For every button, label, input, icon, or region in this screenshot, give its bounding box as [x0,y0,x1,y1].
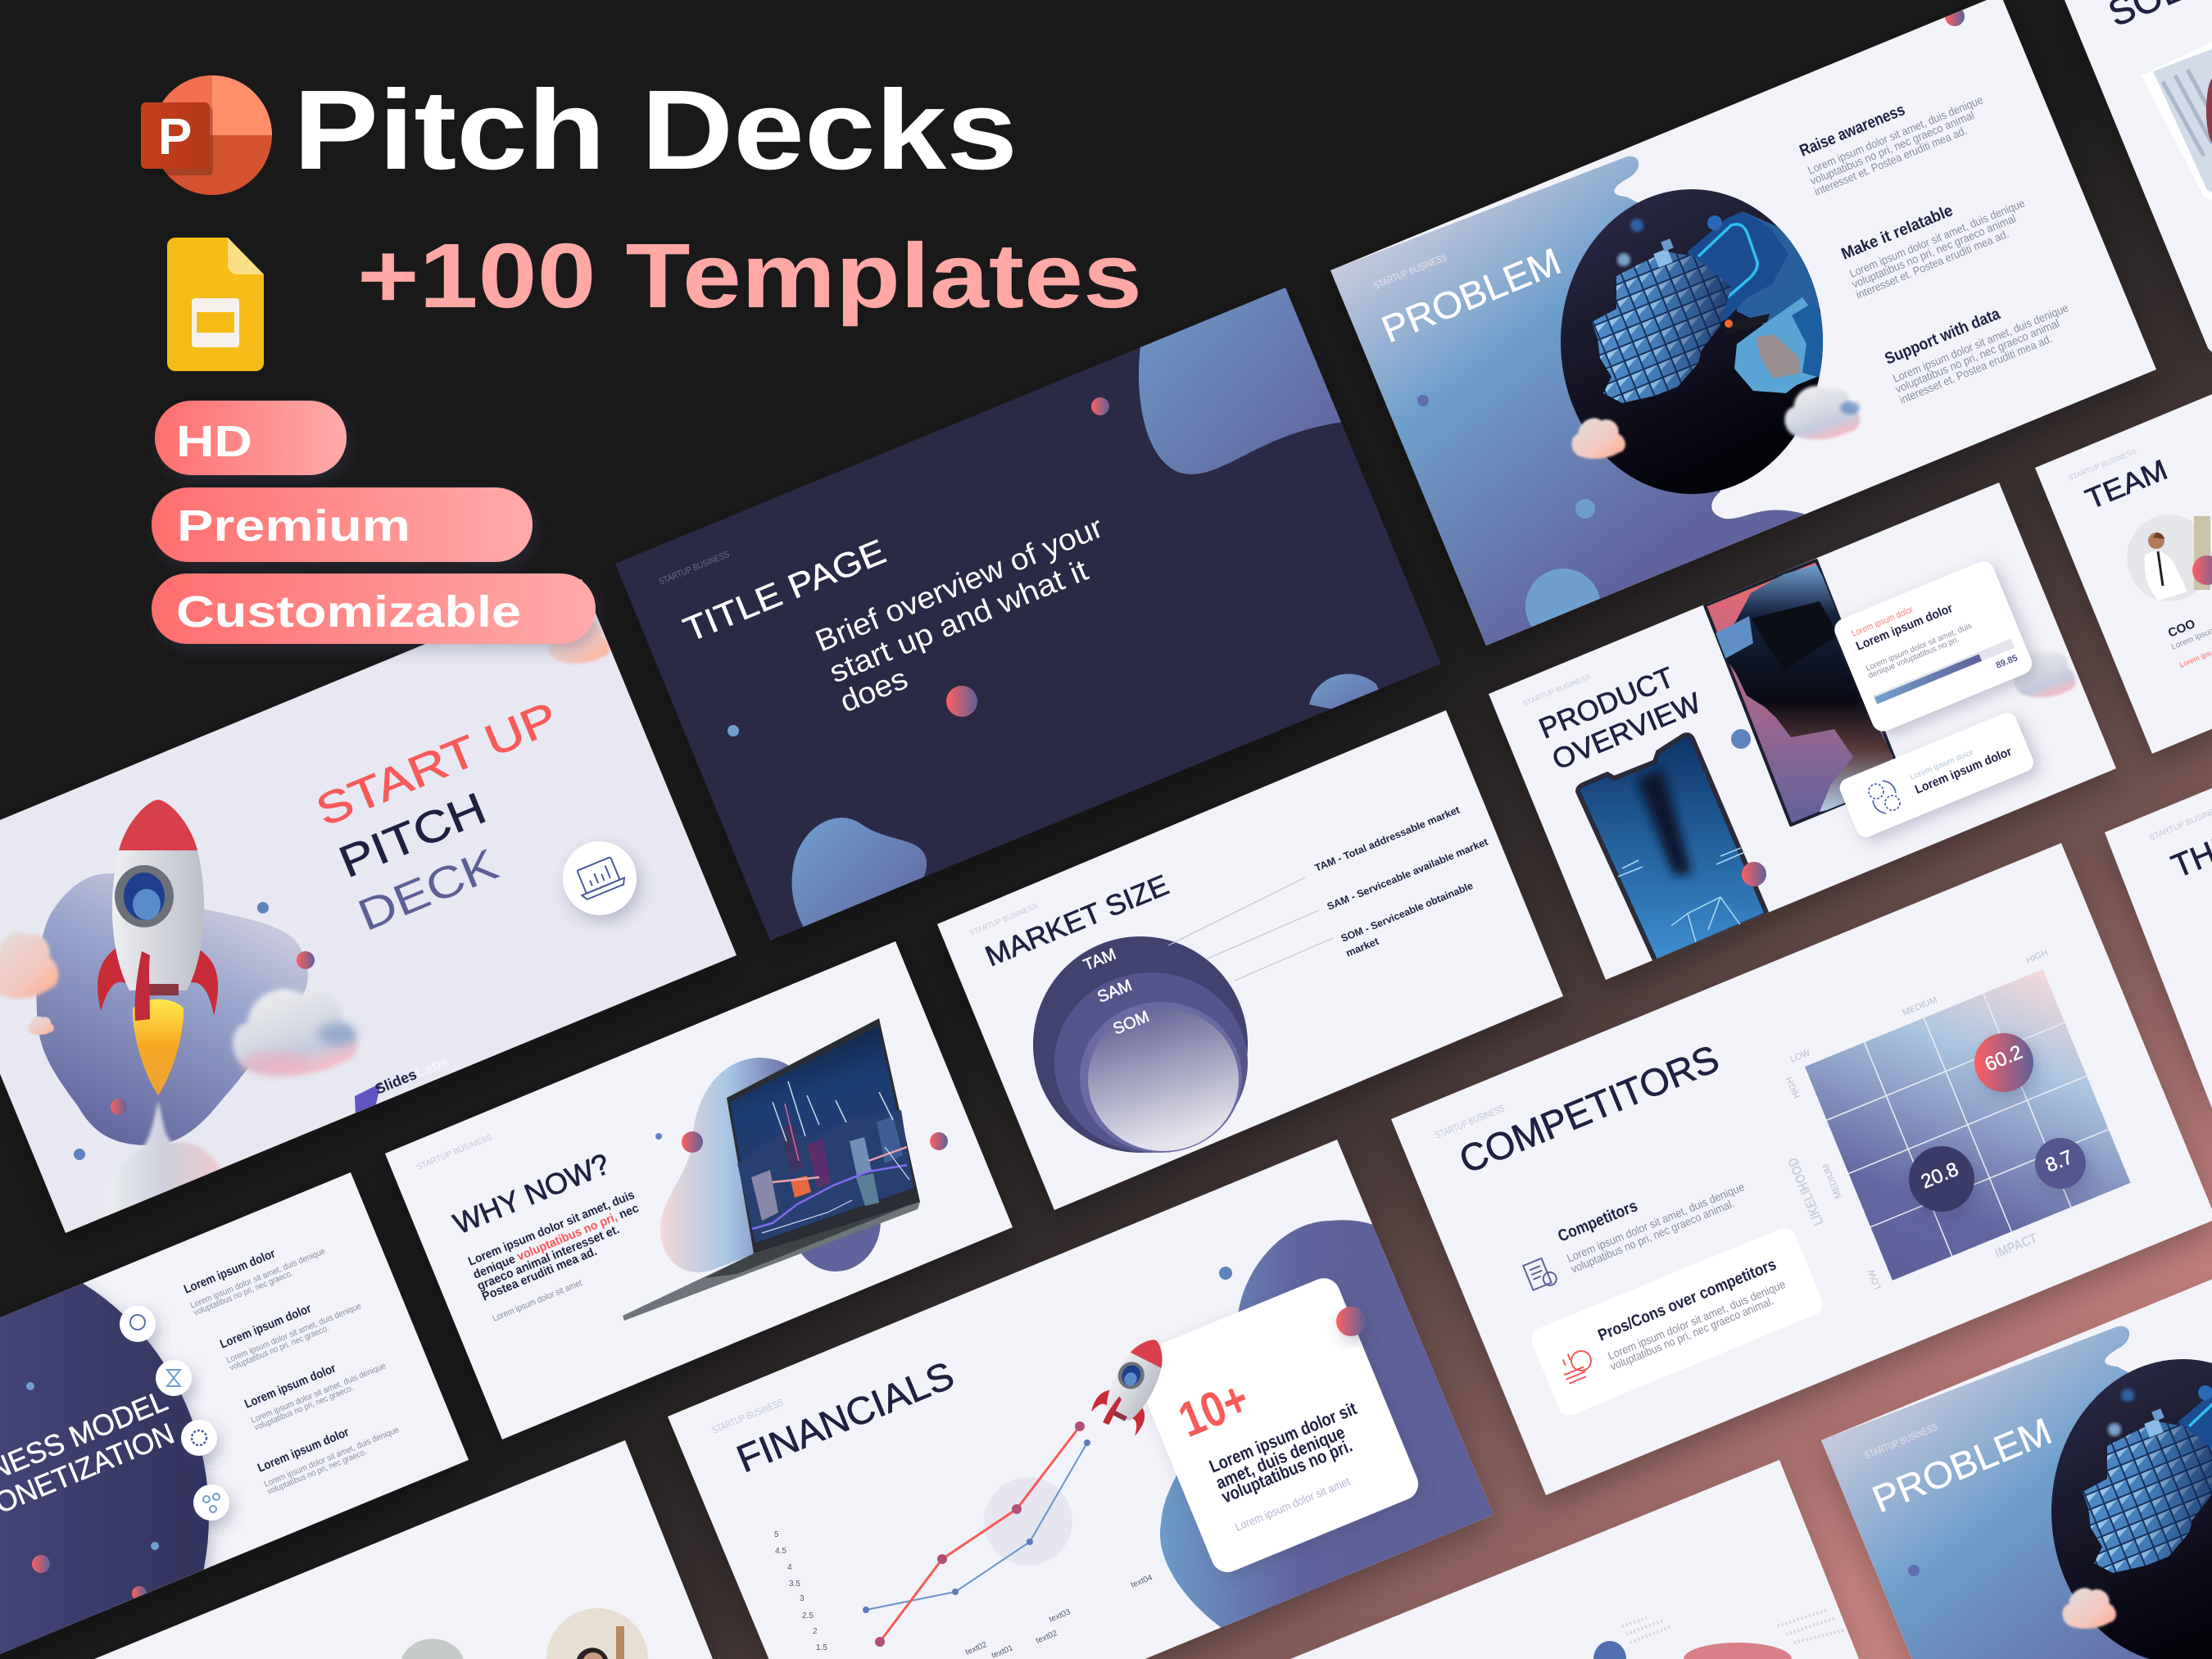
icon: powerpoint: P [158,109,192,165]
heading: product overview: OVERVIEW [1548,687,1706,776]
labels: matrix axes: MEDIUM [1902,995,1938,1018]
photo: gray circle [401,1639,464,1659]
card: 10+: Lorem ipsum dolor sit [1206,1398,1360,1477]
text: why now body: Postea eruditi mea ad. [480,1244,599,1304]
label: startup business: STARTUP BUSINESS [2067,447,2137,483]
labels: matrix axes: LOW [1866,1267,1883,1290]
text: make it relatable: Lorem ipsum dolor sit amet, duis denique [1847,196,2027,280]
text: raise awareness: Raise awareness [1797,101,1908,161]
panel: start up slide [0,579,737,1233]
text: coo: COO [2166,617,2197,641]
photo: coo [2127,514,2212,601]
heading: start up: START UP [310,693,564,836]
blob behind rocket [36,873,308,1145]
panel: bottom left slide [94,1440,713,1659]
text: overview [810,510,1108,718]
chart: line chart: text04 [1130,1573,1154,1590]
blob: behind laptop [791,1170,881,1271]
image: phone [1578,735,1767,962]
text: item 2: Lorem ipsum dolor sit amet, duis denique [225,1301,363,1366]
chart: line chart [774,1421,1154,1659]
text: overview: does [835,661,913,718]
logo: slides labs [355,1053,451,1116]
blob: blue [1593,1641,1626,1659]
rocket flame [133,999,184,1095]
icon: laptop chart [563,841,637,915]
text: why now body: Lorem ipsum dolor sit amet, duis [466,1188,637,1269]
card: pros and cons: Lorem ipsum dolor sit amet, duis denique [1606,1277,1788,1362]
dots [74,902,315,1160]
blob: right [1160,1220,1499,1630]
heading: team: TEAM [2081,454,2172,515]
card: lorem ipsum [1837,710,2036,840]
panel: why now slide [385,941,1013,1439]
text: competitors: Competitors [1556,1197,1640,1246]
chart: nested circles: SAM [1095,977,1135,1007]
title: pitch decks: Pitch Decks [293,67,1018,193]
cloud [2015,650,2076,697]
card: progress: denique voluptatibus no pri. [1867,635,1960,681]
text: overview: Brief overview of your [810,510,1108,658]
dots [655,1131,948,1153]
heading: problem: PROBLEM [1376,239,1566,351]
labels: market segments: TAM - Total addressable market [1313,804,1462,874]
chart: line chart: 1.5 [816,1643,827,1652]
text: why now body: graeco animal interesset et. [475,1222,621,1294]
icon: document gear [1523,1256,1558,1292]
label: startup business: STARTUP BUSINESS [968,902,1039,937]
text: item 3: Lorem ipsum dolor [243,1362,338,1412]
badge: hd: HD [176,417,252,466]
card: progress: Lorem ipsum dolor [1854,601,1955,654]
panel: market size slide [937,710,1563,1210]
chart: line chart: 2.5 [802,1611,814,1620]
panel: problem slide repeat [1821,1164,2212,1659]
labels: market segments: market [1344,935,1381,959]
labels: matrix axes: MEDIUM [1821,1163,1844,1199]
icons: circles [120,1306,229,1521]
labels: market segments: SAM - Serviceable available market [1326,836,1490,913]
heading: pitch: PITCH [333,783,492,887]
text: support with data: Support with data [1883,305,2003,369]
card: lorem ipsum: Lorem ipsum dolor [1913,745,2014,797]
heading: title page: TITLE PAGE [678,532,891,649]
text: item 1: Lorem ipsum dolor [182,1247,278,1297]
badge: customizable [152,573,596,644]
photo: woman [546,1608,648,1659]
labels: matrix axes: IMPACT [1992,1230,2040,1262]
text: overview: start up and what it [824,553,1093,689]
text: raise awareness: voluptatibus no pri, nec graeco animal [1808,108,1976,188]
chart: line chart: text02 [1035,1629,1059,1646]
labels: matrix axes: HIGH [1784,1075,1802,1099]
dots [1731,729,1766,886]
text: item 4: Lorem ipsum dolor [256,1426,351,1475]
text: item 3: Lorem ipsum dolor sit amet, duis denique [250,1361,388,1426]
panel: financials slide [668,1140,1499,1659]
panel: product overview slide [1489,483,2116,980]
card: 10+: voluptatibus no pri. [1218,1435,1355,1507]
chart: nested circles: SOM [1111,1008,1152,1039]
badge: hd [155,401,347,475]
heading: competitors: COMPETITORS [1453,1036,1725,1181]
blob: bottom [791,818,927,927]
card: progress: 89.85 [1995,653,2019,671]
labels: market segments: SOM - Serviceable obtainable [1339,880,1475,945]
subtitle: 100 templates: +100 Templates [357,224,1142,327]
panel: title page slide [615,246,1441,950]
dark circle [0,1245,209,1659]
card: 10+: 10+ [1171,1371,1257,1448]
text: item 1: voluptatibus no pri, nec graeco. [193,1268,294,1318]
text: item 2: voluptatibus no pri, nec graeco. [229,1323,330,1373]
badge: customizable: Customizable [176,587,521,637]
text: item 4: Lorem ipsum dolor sit amet, duis denique [263,1425,401,1489]
heading: deck: DECK [351,840,505,941]
label: startup business: STARTUP BUSINESS [658,550,731,587]
image: person with headset [1705,560,1902,825]
text: why now body: denique voluptatibus no pri, nec [471,1201,641,1282]
chart: risk matrix: 20.8 [1918,1158,1961,1194]
chart: line chart: text02 [964,1640,989,1657]
text: support with data: voluptatibus no pri, nec graeco animal [1893,316,2061,396]
text: make it relatable: Make it relatable [1839,202,1956,264]
chart: nested circles [1033,936,1248,1153]
dots [26,1382,159,1601]
panel: business model slide [0,1172,469,1659]
labels: matrix axes: LIKELIHOOD [1785,1155,1827,1228]
label: startup business: STARTUP BUSINESS [710,1396,785,1436]
label: startup business: STARTUP BUSINESS [1434,1103,1506,1141]
chart: nested circles: TAM [1081,945,1119,975]
card: pros and cons [1528,1225,1826,1418]
chart: risk matrix: 60.2 [1982,1041,2025,1077]
text: why now body [466,1188,641,1304]
problem illustration [1330,156,1860,646]
text: caption: Lorem ipsum dolor sit amet [492,1278,583,1324]
chart: risk matrix [1805,969,2131,1281]
clouds [0,619,610,1075]
heading: product overview: PRODUCT [1534,661,1679,745]
badge: premium: Premium [177,501,410,551]
panel: solution slide [2065,0,2212,352]
card: progress [1831,558,2035,735]
chart: line chart: 4 [787,1563,792,1572]
card: progress: Lorem ipsum dolor sit amet, duis [1865,622,1974,673]
logo: slides labs: SlidesLabs [373,1053,451,1098]
labels: matrix axes: LOW [1789,1048,1812,1065]
dot: red [1336,1307,1366,1336]
card: lorem ipsum: Lorem ipsum dolor [1909,748,1975,782]
text: item 2: Lorem ipsum dolor [218,1302,314,1352]
panel: team slide [2035,256,2212,754]
label: startup business: STARTUP BUSINESS [1372,252,1448,292]
card: progress: Lorem ipsum dolor [1851,605,1915,639]
dots [728,397,1109,737]
blob: right corner [1309,673,1379,709]
heading: why now: WHY NOW? [448,1147,614,1240]
smoke trail [104,1101,226,1225]
panel: competitors slide [1391,843,2212,1495]
label: startup business: STARTUP BUSINESS [1863,1421,1939,1462]
card: 10+ [1128,1273,1423,1577]
text: make it relatable: interesset et. Postea eruditi mea ad. [1854,227,2010,301]
card: pros and cons: voluptatibus no pri, nec graeco animal. [1608,1294,1775,1373]
labels: matrix axes: HIGH [2025,948,2050,966]
laptop [623,1018,920,1321]
blob: top right [1139,288,1341,474]
text: competitors: voluptatibus no pri, nec graeco animal. [1569,1196,1736,1276]
chart: line chart: 3 [800,1594,805,1603]
map dots [1622,1610,1843,1643]
card: 10+: amet, duis denique [1213,1421,1348,1494]
heading: problem: PROBLEM [1866,1409,2057,1521]
heading: financials: FINANCIALS [731,1353,960,1480]
panel: bottom centre slide [1290,1460,1859,1659]
text: item 4: voluptatibus no pri, nec graeco. [266,1447,368,1497]
heading: product overview [1534,661,1706,776]
chart: line chart: 3.5 [789,1580,800,1589]
dot [1945,7,1965,26]
labels: market segments [1313,804,1490,959]
icon: powerpoint [141,75,272,195]
card: pros and cons: Pros/Cons over competitors [1596,1255,1779,1345]
heading: market size: MARKET SIZE [981,869,1173,972]
problem illustration repeat [1821,1326,2212,1659]
label: startup business: STARTUP BUSINESS [1521,673,1592,708]
chart: line chart: text03 [1048,1607,1072,1625]
dot: blue [1219,1267,1232,1280]
labels: matrix axes [1784,948,2050,1290]
text: competitors: Lorem ipsum dolor sit amet, duis denique [1565,1180,1747,1265]
chart: risk matrix: 8.7 [2042,1146,2076,1177]
rocket [97,800,218,1021]
badge: premium [152,487,533,562]
chart: line chart: 5 [774,1530,779,1539]
text: item 1: Lorem ipsum dolor sit amet, duis denique [189,1246,327,1311]
panel: problem slide [1330,0,2156,646]
text: raise awareness: interesset et. Postea eruditi mea ad. [1812,124,1969,198]
text: item 3: voluptatibus no pri, nec graeco. [253,1383,355,1433]
panel: right edge slide [2105,788,2212,1108]
text: support with data: Lorem ipsum dolor sit amet, duis denique [1891,301,2070,385]
card: 10+: Lorem ipsum dolor sit amet [1233,1475,1352,1534]
text: raise awareness: Lorem ipsum dolor sit amet, duis denique [1806,93,1985,177]
label: startup business: STARTUP BUSINESS [415,1133,494,1172]
icon: google slides [167,238,264,371]
solution photo card [2142,42,2212,201]
rocket [1088,1328,1180,1439]
chart: line chart: 4.5 [775,1547,786,1556]
blob: pink [1684,1643,1792,1659]
text: support with data: interesset et. Postea eruditi mea ad. [1897,332,2054,406]
chart: line chart: 2 [813,1627,818,1636]
text: make it relatable: voluptatibus no pri, nec graeco animal [1850,211,2018,291]
